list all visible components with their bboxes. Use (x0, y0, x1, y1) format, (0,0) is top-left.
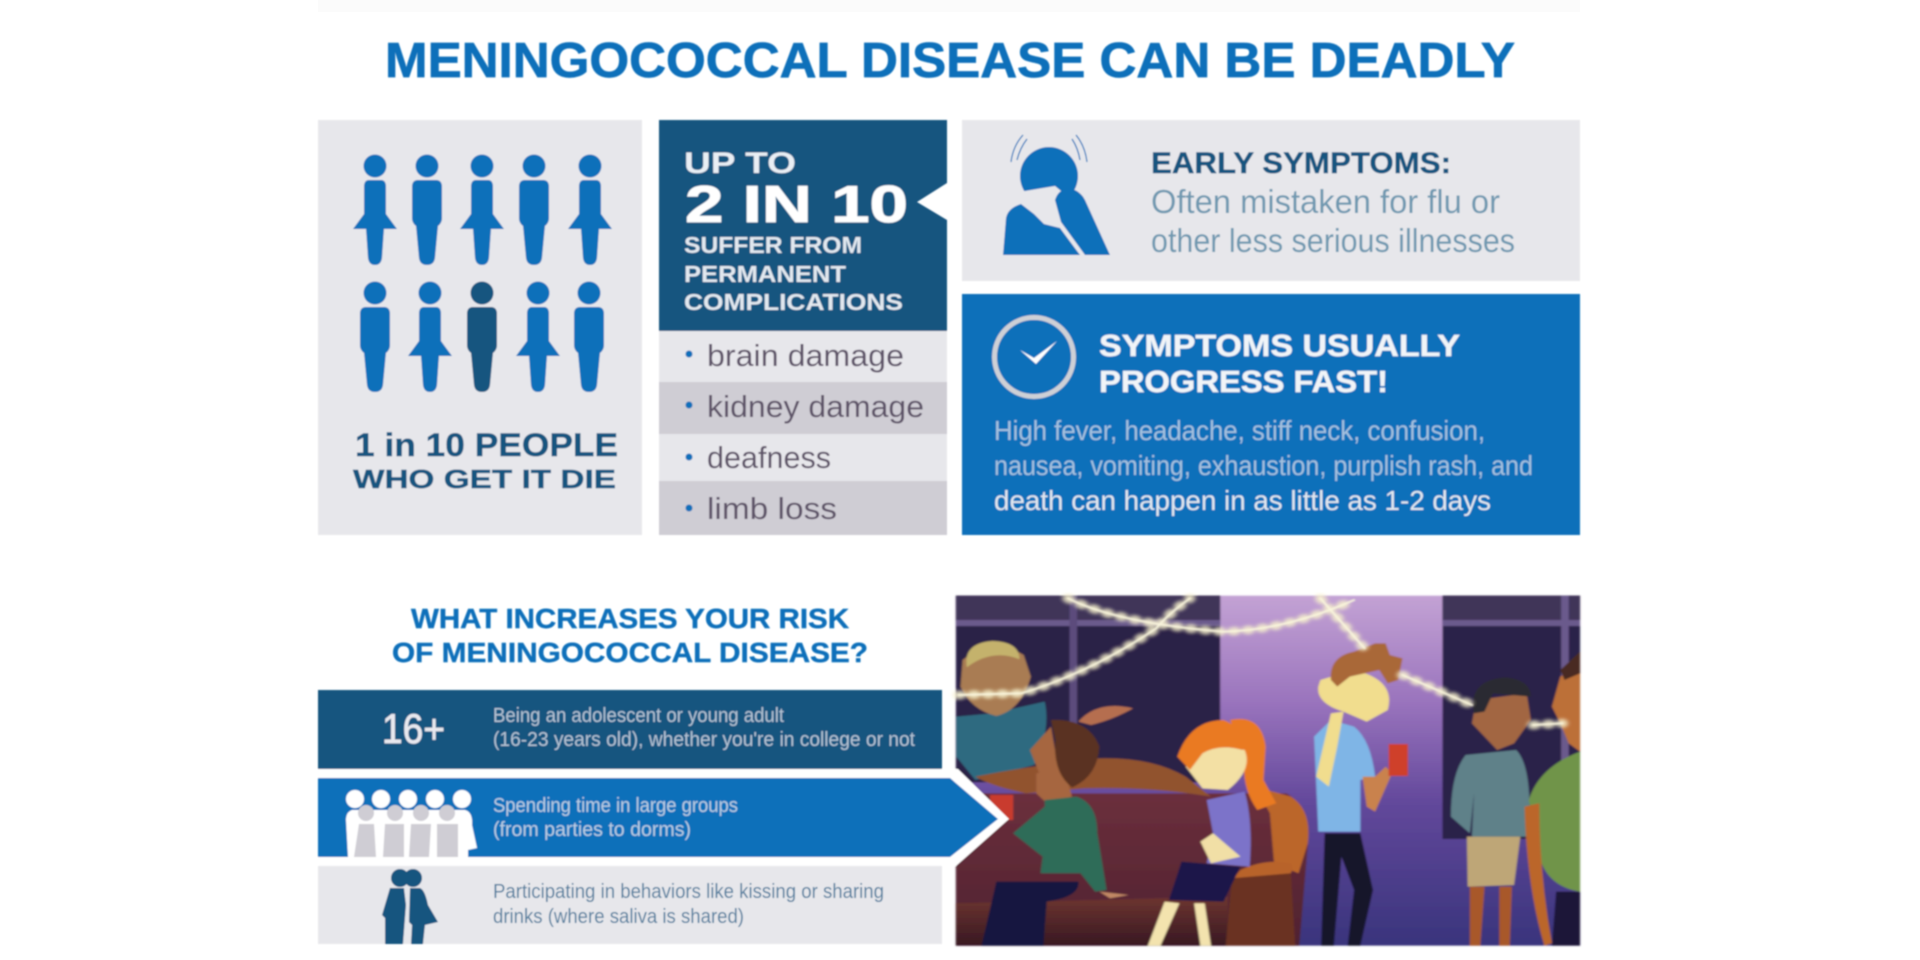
text: large groups: Spending time in large groups (493, 795, 738, 817)
row: limb loss: limb loss (707, 491, 837, 526)
text: complications: COMPLICATIONS (684, 289, 903, 315)
caption: who get it die: WHO GET IT DIE (353, 464, 616, 494)
text: 2 in 10: 2 IN 10 (685, 176, 908, 234)
icon: group of people (346, 790, 477, 857)
row: brain damage: brain damage (707, 338, 904, 373)
header block (659, 120, 947, 331)
risk row: large groups (318, 769, 1009, 866)
text: age range: (16-23 years old), whether you're in college or not (493, 729, 915, 751)
heading: early symptoms: EARLY SYMPTOMS: (1151, 147, 1451, 180)
risk row: age (318, 690, 942, 769)
text: up to: UP TO (684, 147, 796, 180)
panel: symptoms progress fast (962, 294, 1580, 535)
blond man (956, 641, 1133, 780)
text: behaviors: Participating in behaviors like kissing or sharing (493, 881, 884, 903)
text: death timing: death can happen in as little as 1-2 days (994, 485, 1491, 516)
heading: progress fast: PROGRESS FAST! (1099, 364, 1388, 399)
text: other illnesses: other less serious illnesses (1151, 222, 1515, 259)
row: deafness (659, 434, 947, 481)
caption: 1 in 10: 1 in 10 PEOPLE (355, 427, 618, 463)
right window (1442, 596, 1580, 839)
pictogram: ten people (353, 154, 612, 392)
left window (956, 596, 1220, 782)
heading: symptoms usually: SYMPTOMS USUALLY (1099, 328, 1460, 363)
row: limb loss (659, 481, 947, 535)
text: saliva: drinks (where saliva is shared) (493, 906, 744, 928)
red haired girl (1148, 719, 1276, 946)
text: often mistaken: Often mistaken for flu or (1151, 183, 1500, 220)
arrow outline (318, 769, 1009, 866)
icon text: 16 plus: 16+ (382, 705, 445, 752)
infographic (318, 34, 1580, 946)
heading: risk line 1: WHAT INCREASES YOUR RISK (411, 603, 849, 634)
row: deafness: deafness (707, 440, 831, 475)
risk row: kissing (318, 866, 942, 944)
heading: risk line 2: OF MENINGOCOCCAL DISEASE? (392, 637, 868, 668)
boy in grey shirt (1451, 677, 1531, 946)
man in green shirt (1525, 652, 1580, 946)
panel: complications (659, 120, 947, 535)
arrow body (318, 778, 998, 857)
girl in green sweater (982, 720, 1129, 946)
text: adolescent: Being an adolescent or young adult (493, 705, 784, 727)
text: suffer from: SUFFER FROM (684, 232, 862, 258)
string lights (958, 598, 1562, 725)
text: symptom list line 1: High fever, headache, stiff neck, confusion, (994, 415, 1485, 446)
text: permanent: PERMANENT (684, 261, 846, 287)
text: parties to dorms: (from parties to dorms) (493, 819, 691, 841)
row: kidney damage (659, 382, 947, 434)
icon: person holding head (1003, 135, 1110, 255)
panel: 1 in 10 people (318, 120, 642, 535)
text: symptom list line 2: nausea, vomiting, exhaustion, purplish rash, and (994, 450, 1533, 481)
illustration: party scene (956, 596, 1580, 946)
icon: kissing couple (382, 869, 438, 944)
tall man with cup (1314, 643, 1408, 946)
panel: early symptoms (962, 120, 1580, 281)
top band (318, 0, 1580, 12)
icon: clock (994, 318, 1074, 396)
row: brain damage (659, 331, 947, 382)
title: MENINGOCOCCAL DISEASE CAN BE DEADLY (385, 34, 1515, 88)
sofa (956, 758, 1308, 946)
row: kidney damage: kidney damage (707, 389, 924, 424)
